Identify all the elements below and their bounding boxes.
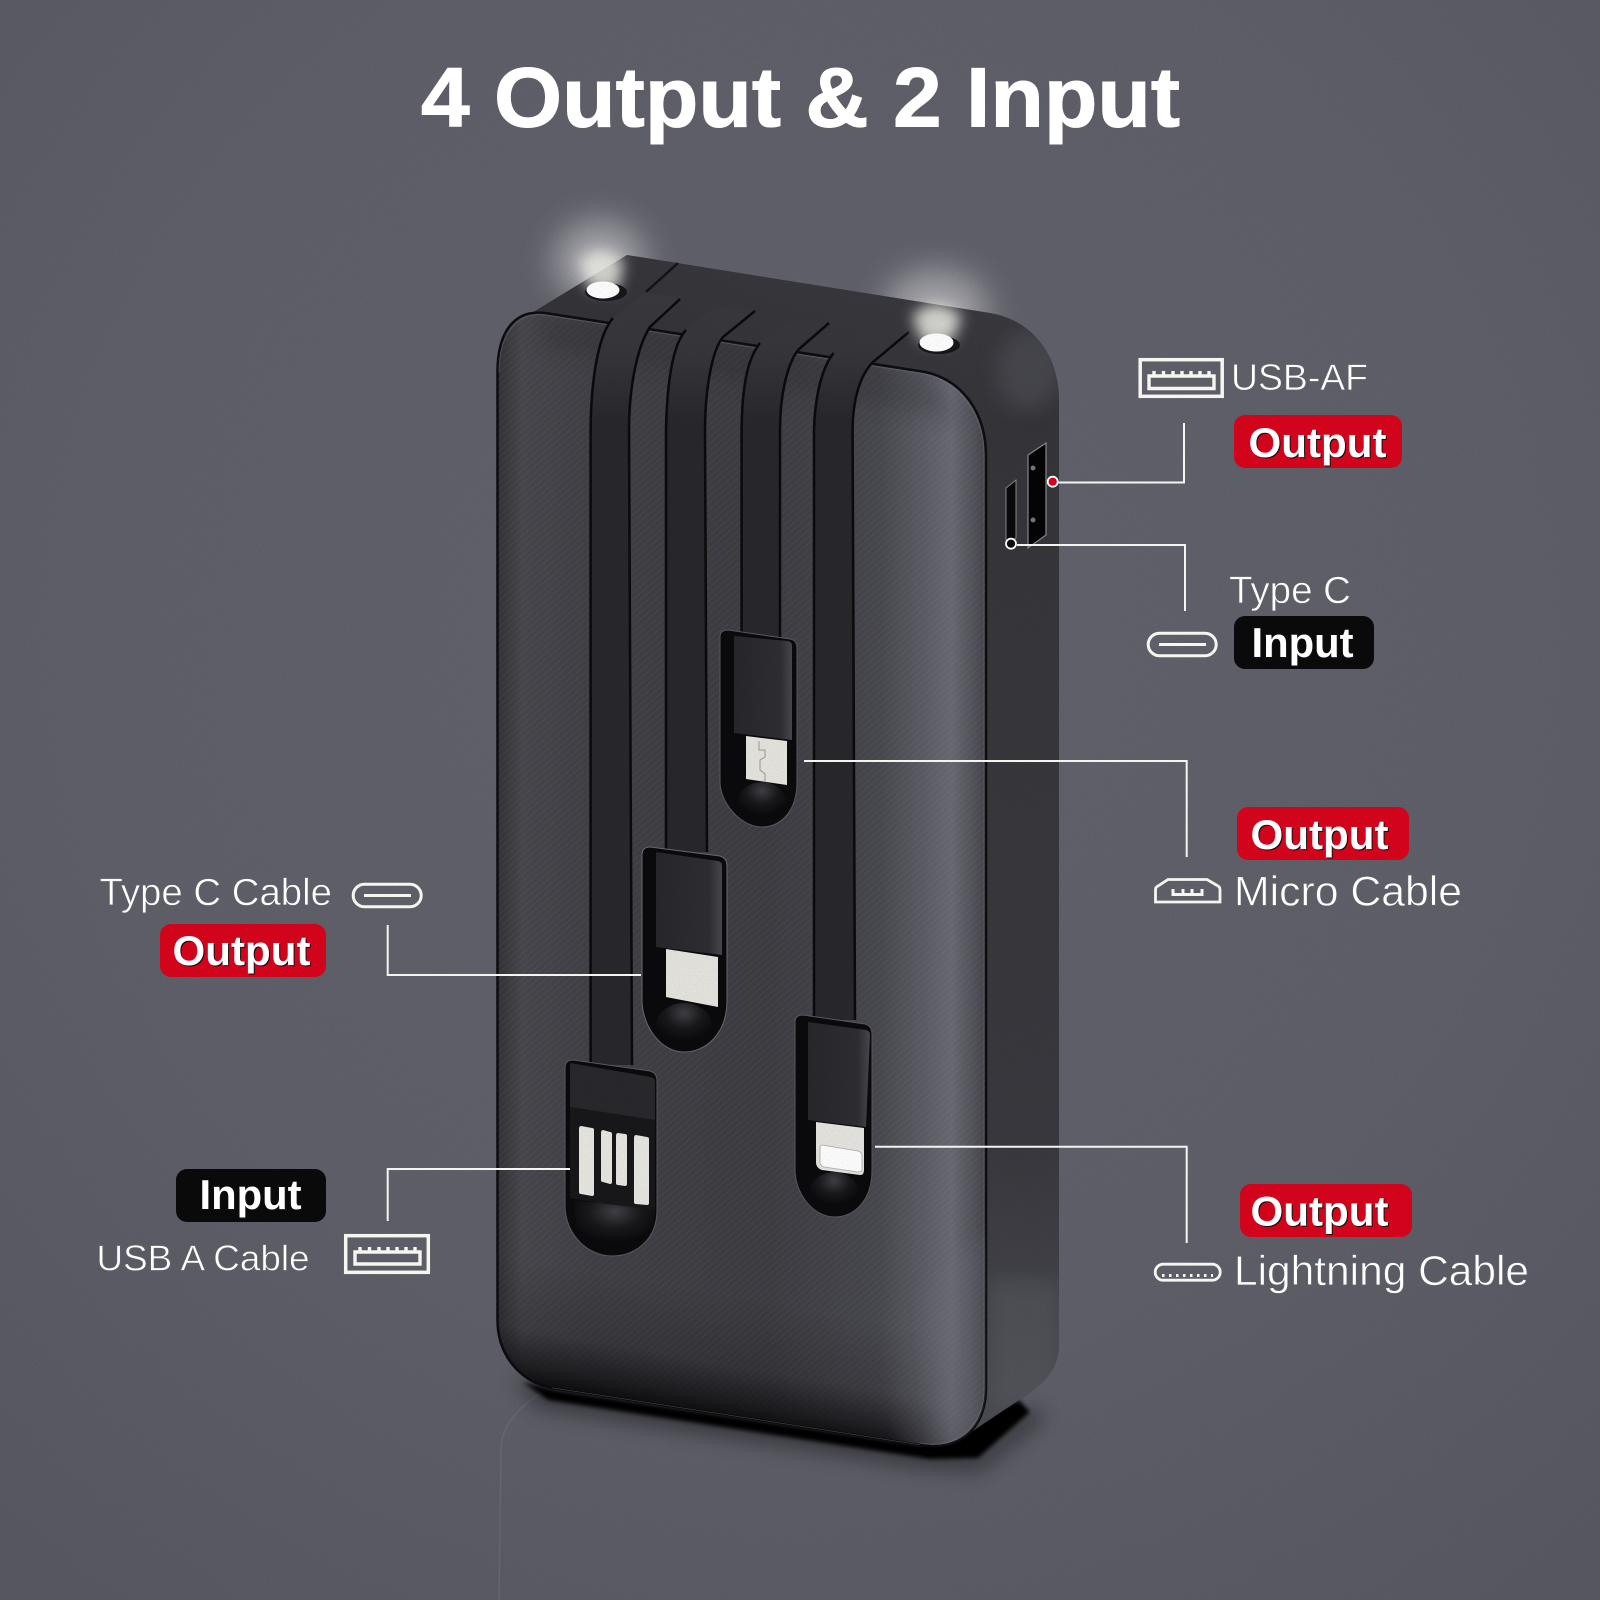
leader line USB A cable xyxy=(388,1169,570,1221)
connector: Type C xyxy=(642,847,727,1052)
leader line Micro xyxy=(804,761,1187,857)
side port Type C xyxy=(1006,480,1016,543)
badge Input xyxy=(176,1169,326,1222)
front rim highlight xyxy=(499,315,984,1444)
label Type C Cable: Type C Cable xyxy=(100,872,332,914)
top face xyxy=(556,255,1048,353)
badge Output: Output xyxy=(1250,811,1389,858)
cable strap 2 xyxy=(666,307,755,852)
flashlight glow left xyxy=(554,220,646,304)
connector: Lightning xyxy=(795,1015,872,1217)
badge Output: Output xyxy=(172,927,311,974)
label USB-AF: USB-AF xyxy=(1231,357,1368,398)
cable strap 4 xyxy=(814,332,909,1020)
badge Output: Output xyxy=(1250,1188,1389,1234)
badge Output: Output xyxy=(1248,419,1387,466)
icon: Type C port xyxy=(1148,633,1216,656)
side port USB-A xyxy=(1028,443,1046,548)
label USB A Cable: USB A Cable xyxy=(96,1238,310,1278)
title: 4 Output & 2 Input xyxy=(421,50,1180,144)
icon: USB A port xyxy=(346,1236,428,1272)
body silhouette: side face xyxy=(498,255,1059,1447)
label Type C: Type C xyxy=(1229,570,1351,612)
icon: Type C port xyxy=(353,884,421,907)
badge Input xyxy=(1234,616,1374,669)
label Micro Cable: Micro Cable xyxy=(1234,868,1462,914)
floor reflection of the power bank xyxy=(499,1390,546,1600)
callout: Type C cable xyxy=(100,872,641,977)
LED left xyxy=(578,250,627,301)
connector: USB A xyxy=(565,1060,657,1256)
leader line Lightning xyxy=(875,1147,1187,1243)
connector: micro USB xyxy=(720,630,797,827)
callout: Micro cable xyxy=(804,761,1462,914)
callout: USB-AF output xyxy=(1048,357,1402,487)
ground shadow xyxy=(515,1376,1045,1472)
front face xyxy=(498,313,986,1446)
LED right xyxy=(912,304,962,354)
power bank xyxy=(480,220,1064,1455)
callout: USB A cable xyxy=(96,1169,570,1278)
side face highlight xyxy=(994,332,1058,1400)
leader line Type C xyxy=(1006,539,1185,611)
icon: Micro USB port xyxy=(1156,880,1220,902)
callout: Type C input xyxy=(1006,539,1374,669)
leader line Type C cable xyxy=(388,925,641,975)
badge Input: Input xyxy=(200,1171,302,1218)
badge Input: Input xyxy=(1252,619,1354,666)
callout: Lightning cable xyxy=(875,1147,1529,1294)
flashlight glow right xyxy=(884,270,988,354)
icon: Lightning port xyxy=(1155,1264,1220,1280)
front face texture and shading xyxy=(480,300,1000,1455)
label Lightning Cable: Lightning Cable xyxy=(1234,1247,1529,1294)
icon: USB A port xyxy=(1140,360,1222,396)
cable strap 3 xyxy=(742,322,829,640)
cable strap 1 xyxy=(591,263,680,1065)
leader line USB-AF xyxy=(1048,423,1184,487)
USB A contact pins xyxy=(579,1126,649,1205)
